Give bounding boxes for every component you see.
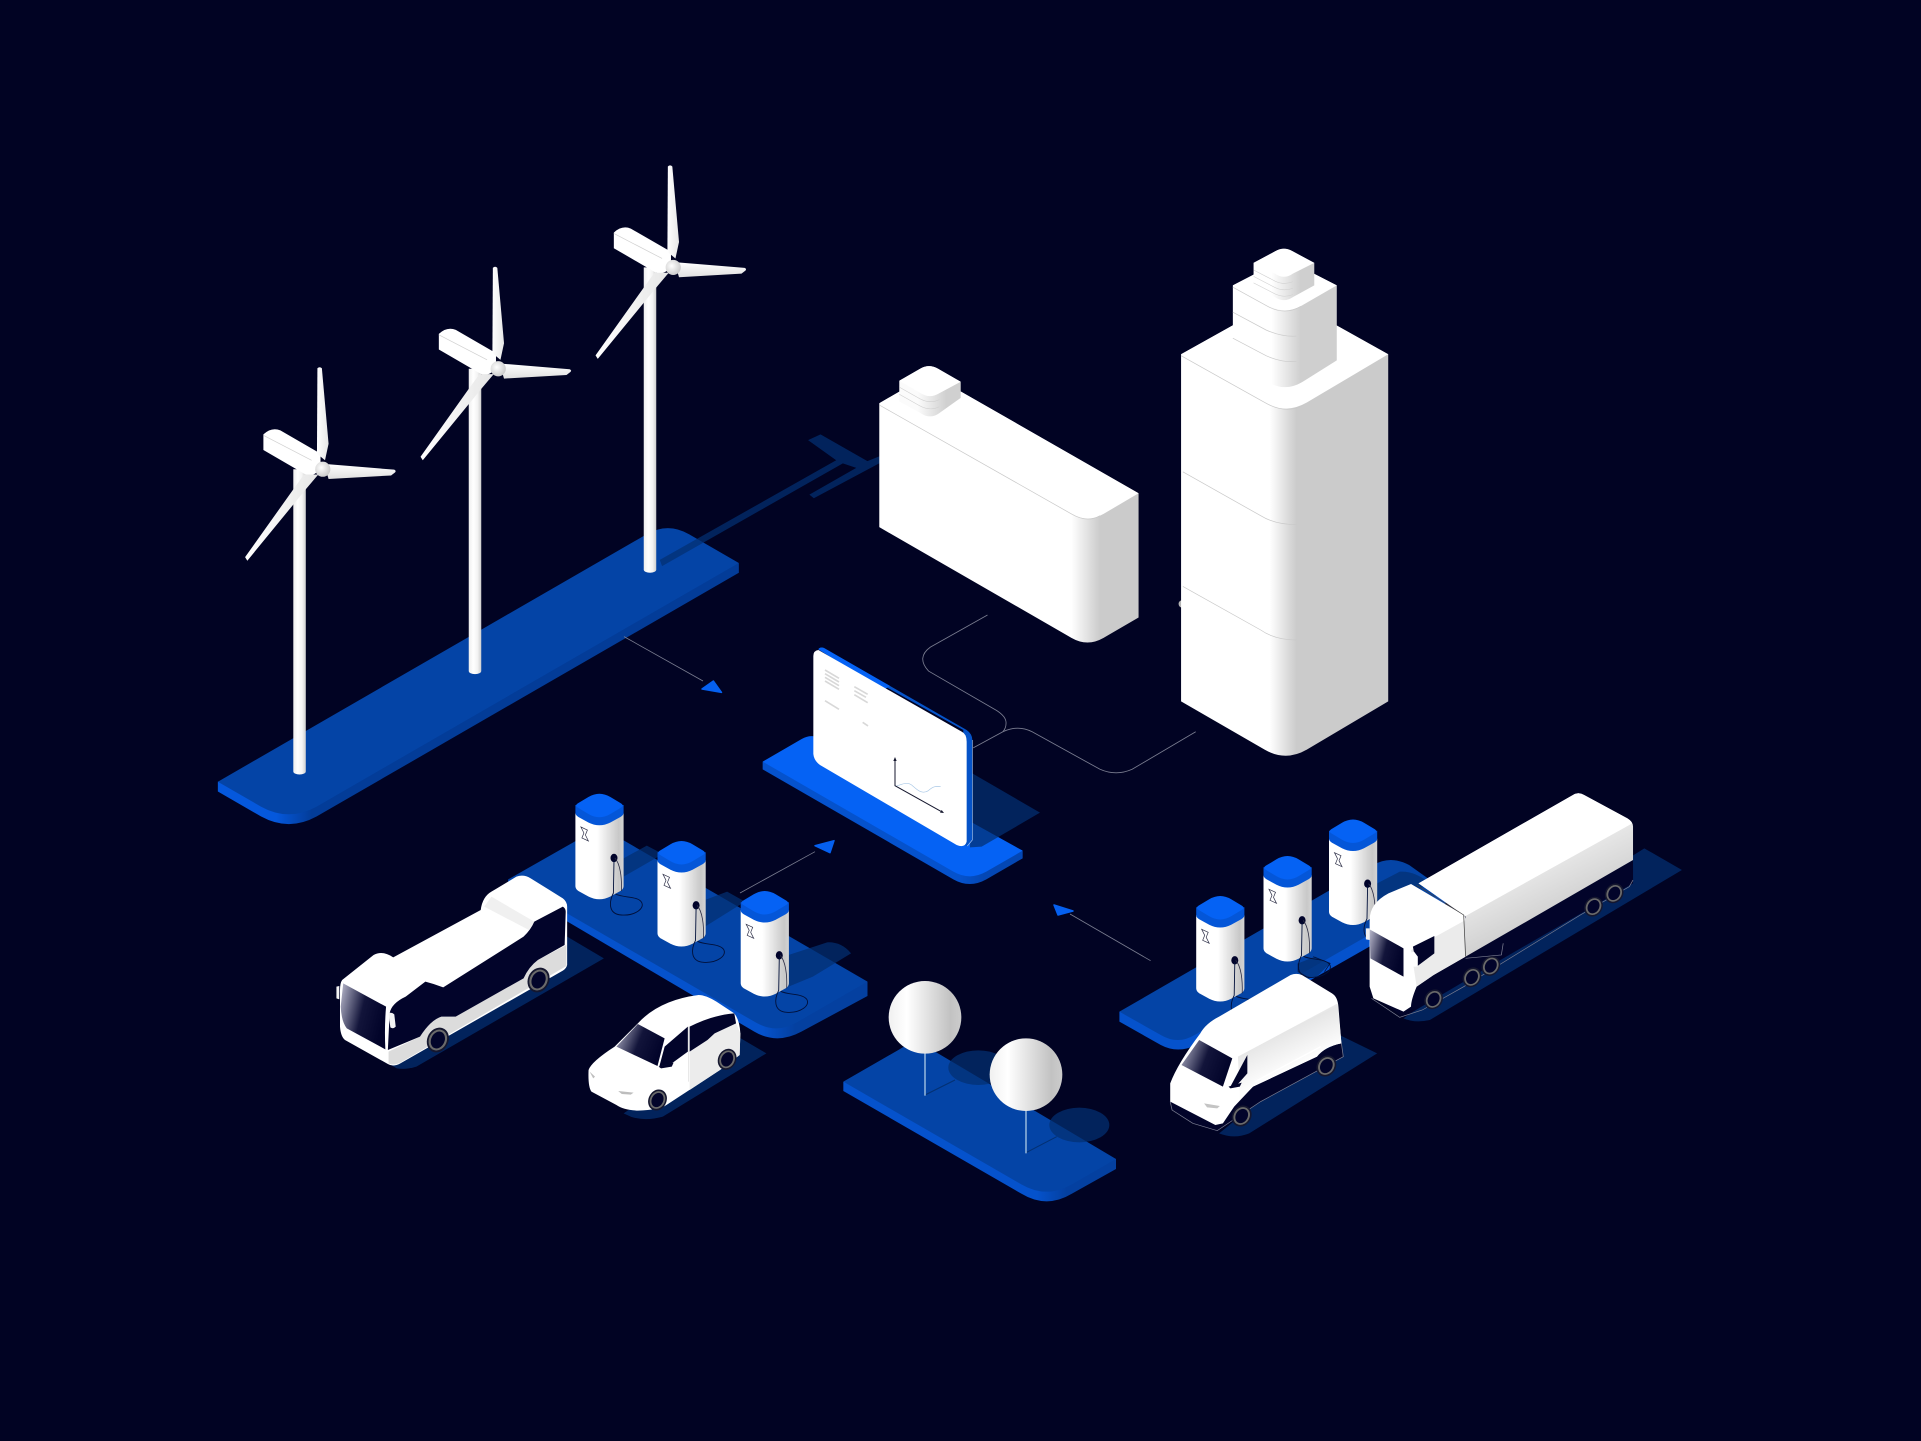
wind turbine 1 — [245, 367, 396, 775]
truck mirror — [1411, 952, 1418, 967]
tree 2 — [990, 1038, 1062, 1153]
bus shadow — [388, 937, 604, 1069]
charger 1 — [1196, 896, 1263, 1017]
vehicle: bus — [336, 876, 604, 1069]
platform: left charging base — [508, 829, 867, 1038]
cable: long battery to panel — [923, 615, 1006, 748]
trailer — [1419, 793, 1633, 957]
truck cab — [1370, 884, 1466, 1012]
dashboard screen — [813, 648, 972, 846]
car mirror — [659, 1063, 674, 1068]
van side window — [1230, 1055, 1247, 1087]
van chassis — [1170, 1042, 1343, 1132]
platform: tree base — [843, 1044, 1116, 1201]
wind turbine 2 — [421, 267, 571, 674]
truck windscreen — [1370, 929, 1403, 977]
bus roof detail — [484, 897, 534, 930]
arrow: charging hub to dashboard — [740, 841, 834, 893]
cable: tower battery to panel — [1003, 728, 1196, 773]
panel: left charging hub — [508, 794, 867, 1038]
car body — [588, 995, 740, 1111]
power conduit to battery — [660, 434, 881, 566]
van windscreen — [1181, 1040, 1232, 1087]
charger 2 — [1264, 856, 1330, 977]
battery: tall tower — [1181, 249, 1388, 756]
bus side windows — [388, 907, 566, 1050]
platform: wind farm base — [218, 528, 739, 824]
wind turbine 3 — [596, 165, 746, 573]
vehicle: car — [588, 995, 766, 1119]
vehicle: truck — [1366, 793, 1682, 1021]
car shadow — [624, 1037, 766, 1119]
truck side window — [1413, 936, 1434, 967]
van wheels — [1229, 1103, 1255, 1129]
tree shadows — [925, 1080, 955, 1095]
bus mirrors — [336, 986, 396, 1028]
panel: control dashboard — [763, 648, 1040, 884]
charger shadows — [624, 846, 851, 987]
truck chassis — [1370, 860, 1633, 1017]
van mirror — [1229, 1083, 1242, 1088]
truck shadow — [1403, 848, 1682, 1021]
panel: right charging hub — [1119, 819, 1446, 1049]
van headlight — [1204, 1103, 1220, 1108]
screen text lines — [825, 670, 868, 726]
charger shadows on base — [1298, 872, 1430, 980]
van body — [1170, 974, 1341, 1125]
battery: long module — [879, 366, 1139, 642]
dashboard shadow — [970, 773, 1040, 847]
vehicle: van — [1170, 974, 1377, 1136]
arrow: wind farm to control panel — [624, 637, 722, 692]
charger 3 — [741, 891, 808, 1012]
car headlights — [590, 1072, 634, 1095]
car windscreen — [616, 1024, 665, 1066]
truck wheels — [1421, 987, 1446, 1012]
panel: stationary batteries — [879, 249, 1388, 773]
bus windscreen — [341, 983, 386, 1049]
panel: trees — [843, 981, 1116, 1201]
small connector behind tower — [1179, 600, 1187, 608]
tree 1 — [889, 981, 961, 1096]
car wheels — [645, 1087, 670, 1113]
bus body — [340, 876, 567, 1066]
line chart — [893, 757, 944, 813]
charger 3 — [1329, 819, 1396, 941]
charger 1 — [575, 794, 642, 915]
platform: dashboard base — [763, 736, 1023, 884]
van shadow — [1219, 1035, 1377, 1136]
car side windows — [659, 1013, 736, 1067]
platform: right charging base — [1119, 860, 1446, 1049]
panel: wind farm — [218, 165, 881, 824]
bus wheels — [423, 1025, 453, 1055]
charger 2 — [658, 841, 724, 962]
arrow: fleet hub to dashboard — [1054, 905, 1151, 961]
